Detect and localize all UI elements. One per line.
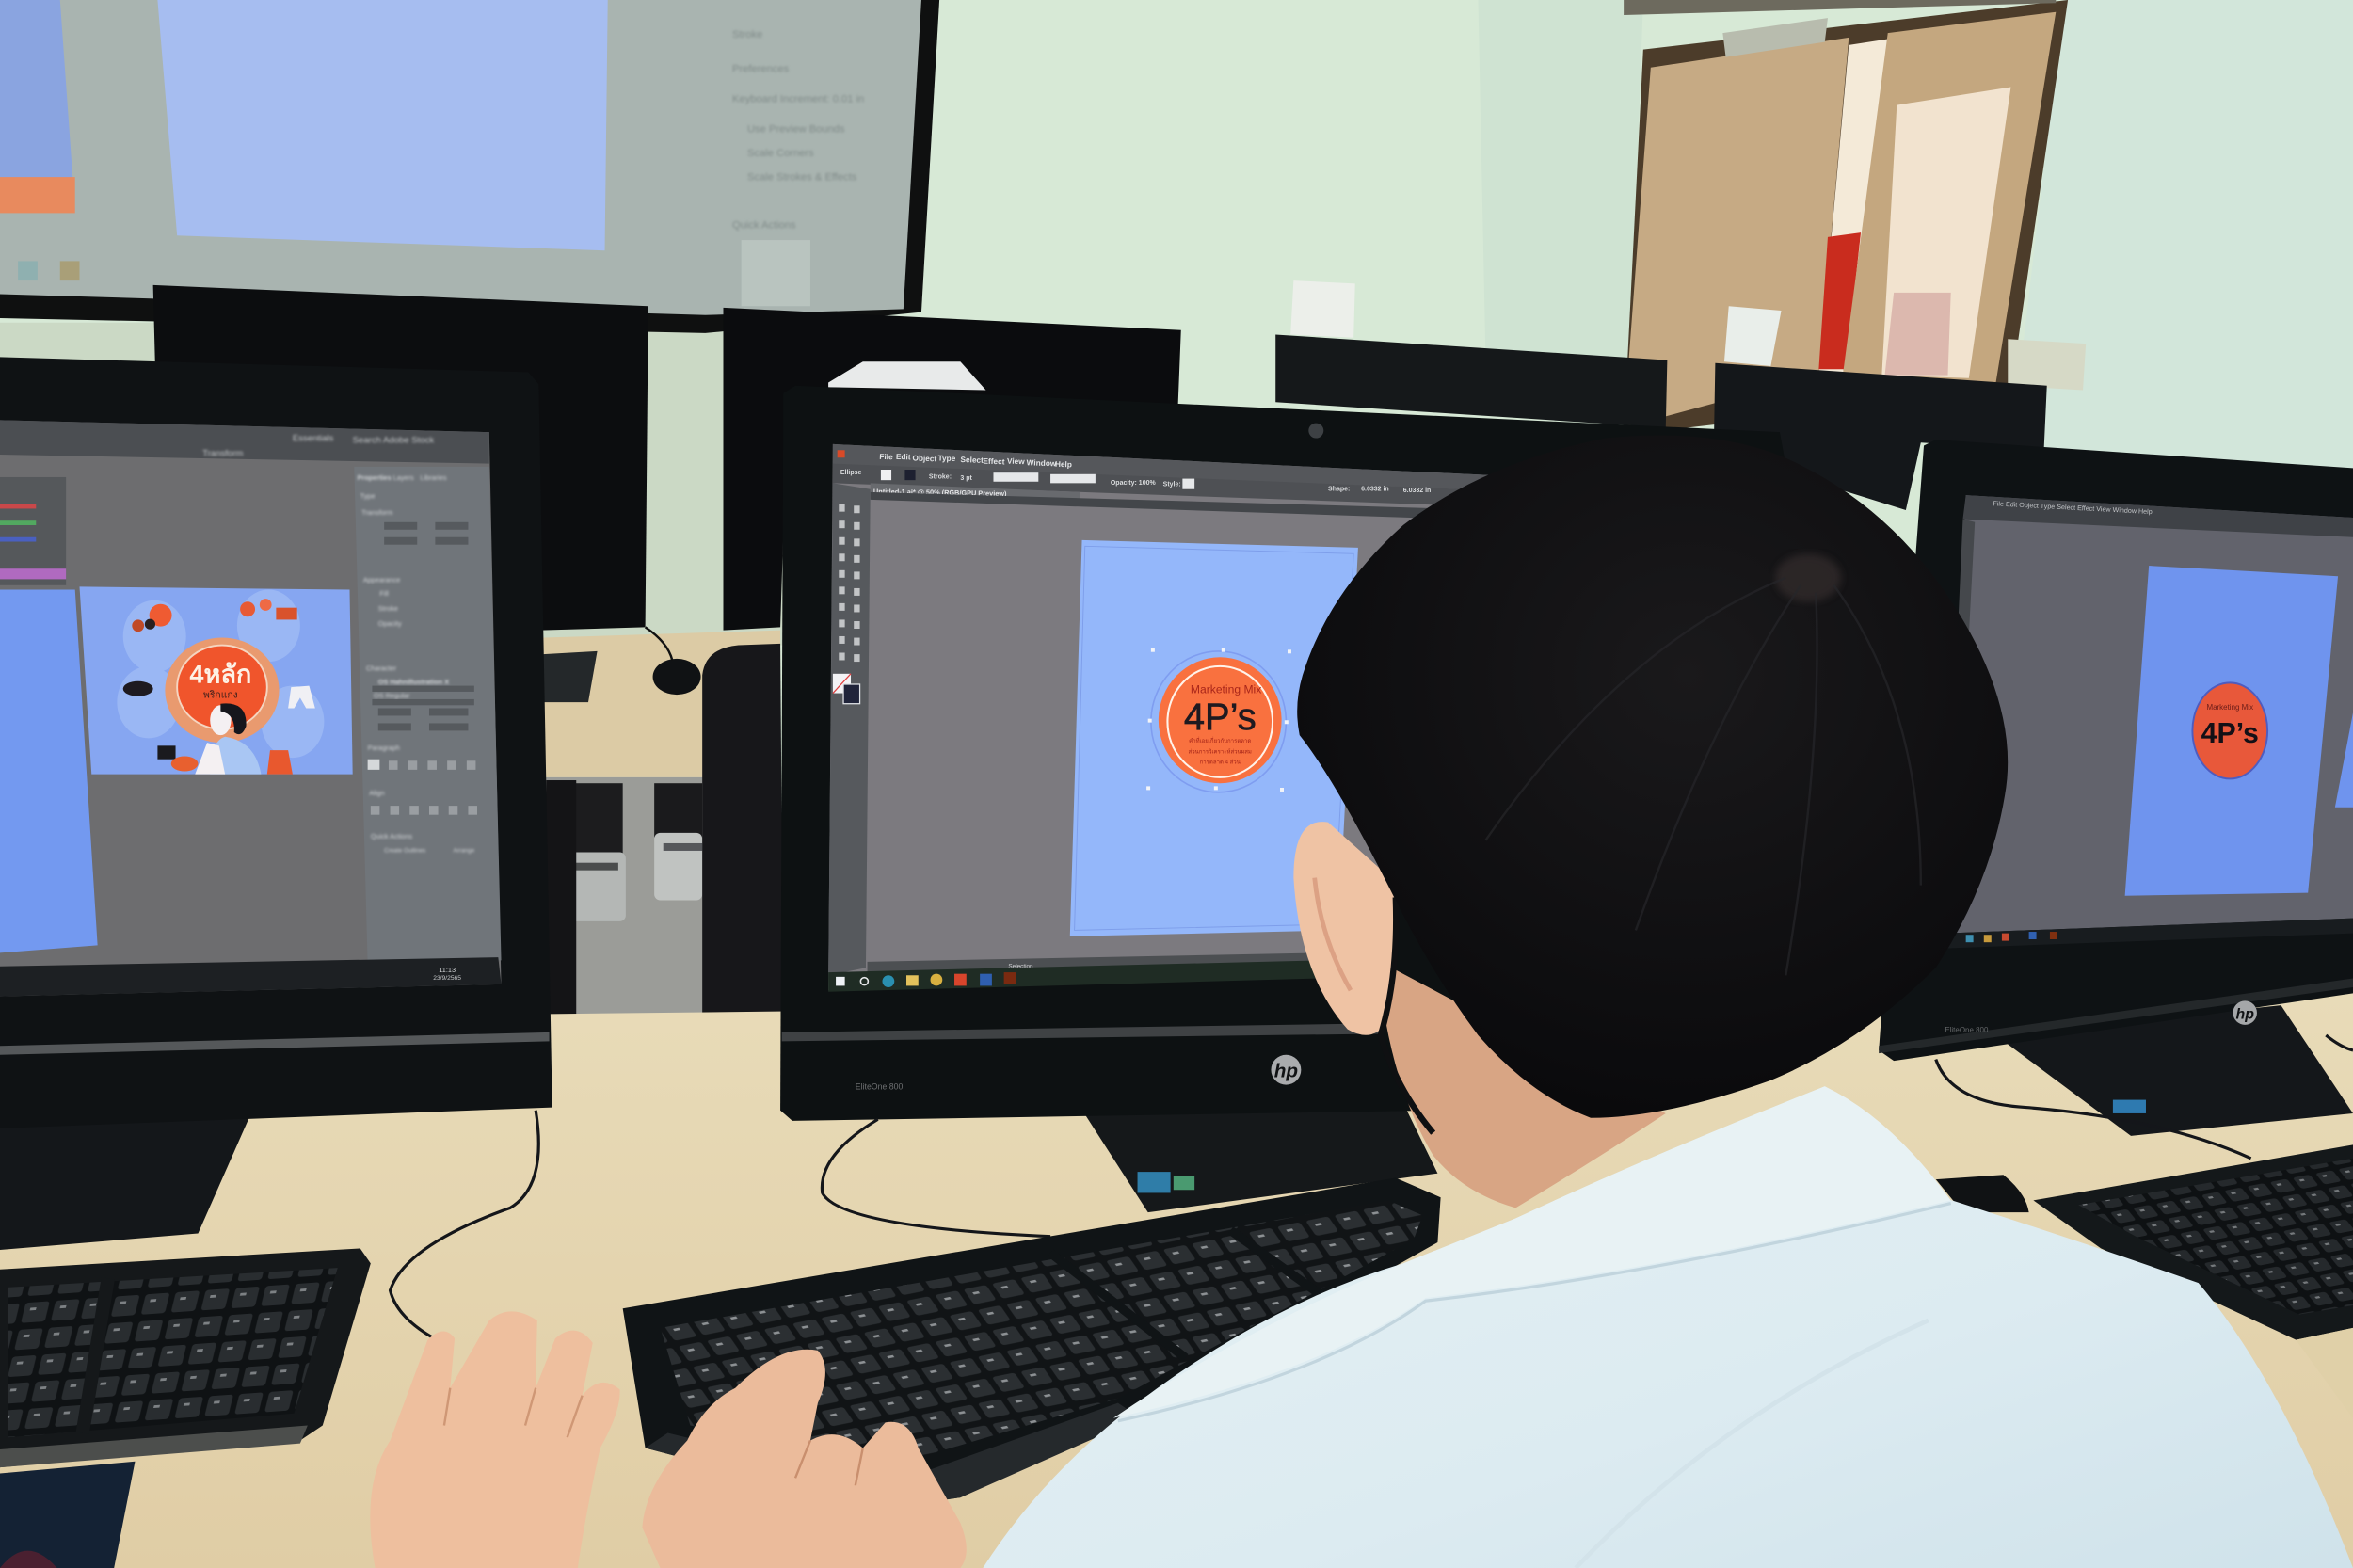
model label: EliteOne 800 — [856, 1081, 904, 1091]
selection ring — [1151, 651, 1286, 792]
4P's badge — [2192, 682, 2267, 778]
properties tabs: Properties — [357, 473, 392, 482]
second cable — [2326, 1035, 2353, 1050]
option labels: 3 pt — [960, 475, 973, 482]
option labels: 6.0332 in — [1361, 486, 1389, 492]
shirt fold — [1576, 1320, 1929, 1568]
screen — [828, 444, 1500, 990]
bezel — [1879, 440, 2353, 1061]
bezel — [780, 386, 1785, 1121]
right monitor cable — [1936, 1060, 2251, 1159]
properties panel — [354, 467, 502, 964]
artboard — [1070, 540, 1358, 936]
centre monitor cable — [822, 1119, 1050, 1237]
menu items: Select — [960, 455, 984, 465]
badge heading: Marketing Mix — [2206, 703, 2253, 712]
back monitor 1 — [153, 285, 648, 631]
tray clock: 11:13 — [439, 966, 456, 974]
student's ear — [1293, 822, 1399, 1035]
back monitor 3 — [1275, 335, 1667, 427]
infographic badge — [165, 638, 280, 743]
back monitor 2 — [723, 308, 1181, 631]
hair strands — [1485, 578, 1921, 975]
menu text: File Edit Object Type Select Effect View Window Help — [1993, 500, 2153, 516]
infographic title: 4หลัก — [189, 659, 251, 688]
smartphone on right desk — [1936, 1175, 2029, 1212]
projected preferences button — [742, 240, 810, 306]
next artboard — [2335, 712, 2353, 808]
stand — [1080, 1103, 1437, 1212]
badge ring — [1167, 666, 1273, 777]
selection handles — [1146, 648, 1291, 792]
mask strap — [1381, 897, 1433, 1133]
student's neck — [1378, 960, 1666, 1208]
document tab — [871, 483, 1080, 505]
centre keyboard — [623, 1177, 1441, 1510]
hp logo — [1271, 1055, 1301, 1085]
menu bar — [0, 420, 489, 464]
toolbar text: Search Adobe Stock — [353, 435, 434, 445]
color sliders — [0, 504, 66, 579]
toolbar — [1962, 495, 2353, 537]
rear keyboard and mouse — [543, 627, 701, 702]
left keyboard — [0, 1248, 371, 1467]
app icon — [838, 450, 845, 457]
menu items — [879, 452, 1072, 469]
tools strip — [1945, 520, 1975, 919]
chin highlight — [1879, 978, 2353, 1053]
fill and stroke swatches — [833, 674, 860, 704]
properties tabs: Layers — [393, 473, 414, 482]
option labels: 6.0332 in — [1403, 488, 1431, 494]
stroke option fields — [881, 470, 1194, 489]
taskbar — [0, 957, 502, 997]
smartphone — [0, 1462, 135, 1568]
paragraph and align icons — [368, 760, 477, 815]
projected menu text: Use Preview Bounds — [747, 123, 845, 135]
properties tabs: Libraries — [420, 473, 447, 482]
badge heading: Marketing Mix — [1191, 683, 1261, 696]
options bar — [833, 464, 1500, 507]
hp logo — [2233, 1000, 2257, 1025]
floor — [543, 777, 780, 1035]
artboard — [2125, 566, 2338, 896]
taskbar — [1945, 919, 2353, 949]
model label: EliteOne 800 — [1945, 1026, 1989, 1034]
properties tabs: Type — [360, 491, 376, 500]
document title: Untitled-1.ai* @ 50% (RGB/GPU Preview) — [873, 488, 1007, 498]
chin highlight — [782, 1023, 1381, 1041]
student's shirt — [983, 1086, 2353, 1568]
menu items: View — [1007, 456, 1025, 466]
badge body text: คำที่เอยเกี่ยวกับการตลาด — [1189, 737, 1251, 744]
tools panel — [828, 483, 871, 975]
badge body text: การตลาด 4 ส่วน — [1200, 759, 1241, 765]
projected artboard — [157, 0, 608, 250]
collar shadow — [1118, 1204, 1951, 1421]
badge title: 4P’s — [1184, 696, 1257, 738]
right hand — [642, 1350, 967, 1568]
bezel — [0, 357, 552, 1128]
color panel — [0, 477, 66, 585]
infographic subtitle: พริกแกง — [203, 689, 238, 700]
artboard guide — [1075, 546, 1353, 930]
projected menu text: Scale Strokes & Effects — [747, 171, 857, 183]
left monitor cable — [391, 1111, 538, 1343]
infographic soft bubbles — [117, 590, 324, 758]
option labels — [840, 470, 1431, 494]
transform fields — [372, 522, 474, 730]
properties tabs: Quick Actions — [371, 832, 413, 840]
infographic small icons — [123, 599, 315, 775]
projected menu text: Keyboard Increment: 0.01 in — [732, 93, 864, 104]
centre monitor — [780, 386, 1785, 1212]
menu items: Window — [1026, 457, 1057, 468]
student's hair — [1297, 436, 2008, 1118]
collar — [1113, 1086, 1951, 1418]
stand — [0, 1118, 249, 1250]
hp logo: hp — [2235, 1007, 2254, 1023]
classroom doors — [1624, 0, 2068, 435]
rear desk — [543, 631, 780, 777]
projected taskbar icons — [18, 261, 80, 280]
wall column — [1478, 0, 1643, 420]
badge title: 4P’s — [2201, 718, 2259, 749]
toolbar text: Essentials — [293, 434, 334, 444]
properties tabs: Transform — [361, 508, 392, 517]
properties tabs: OS Hahnillustration X — [378, 678, 449, 686]
option labels: Shape: — [1328, 486, 1350, 492]
option labels: Stroke: — [929, 474, 952, 481]
properties tabs: Opacity — [378, 619, 402, 628]
left monitor — [0, 357, 552, 1250]
rear chair base — [546, 780, 702, 1028]
badge body text — [1189, 737, 1252, 765]
properties tabs: Paragraph — [368, 744, 400, 752]
webcam — [1308, 424, 1323, 439]
tool icons — [839, 504, 860, 662]
infographic figure — [195, 703, 261, 775]
right monitor — [1879, 440, 2353, 1136]
hp logo: hp — [1274, 1061, 1298, 1082]
black chair back — [702, 644, 783, 1028]
energy stickers — [1138, 1172, 1194, 1192]
option labels: Opacity: 100% — [1111, 480, 1156, 487]
projected side panel — [0, 0, 75, 210]
badge body text: ส่วนการวิเคราะห์ส่วนผสม — [1189, 747, 1252, 755]
tray date: 23/9/2565 — [433, 975, 461, 982]
menu items: Help — [1055, 459, 1072, 469]
right keyboard — [2033, 1144, 2353, 1340]
hair highlight — [1775, 553, 1841, 601]
option labels: Style: — [1163, 482, 1181, 488]
4P's badge — [1159, 657, 1282, 783]
menu items: File — [879, 452, 893, 461]
toolbar text — [202, 434, 434, 459]
paper on back monitor — [828, 361, 986, 391]
projected bottom-left tab — [0, 177, 75, 213]
blue sticker — [2113, 1100, 2146, 1113]
menu items: Effect — [983, 456, 1005, 466]
back monitor 4 — [1714, 363, 2047, 510]
option labels: Ellipse — [840, 470, 862, 476]
screen — [1945, 495, 2353, 934]
properties tabs: Character — [366, 664, 397, 673]
taskbar — [828, 960, 1321, 992]
menu items: Edit — [896, 452, 911, 461]
right wall — [2010, 0, 2353, 480]
properties tabs — [357, 473, 475, 855]
stand — [1996, 1005, 2353, 1136]
status bar — [868, 952, 1321, 972]
properties tabs: Arrange — [454, 848, 475, 855]
properties tabs: Fill — [379, 589, 389, 598]
status label: Selection — [1008, 963, 1033, 969]
projected menu text: Stroke — [732, 29, 762, 40]
projected menu text: Preferences — [732, 64, 790, 75]
taskbar icons — [836, 972, 1016, 987]
properties tabs: Stroke — [378, 604, 398, 613]
menu items: Object — [912, 453, 937, 463]
front desk — [0, 993, 2353, 1568]
lower wall behind monitors — [0, 323, 960, 646]
menu items: Type — [937, 453, 956, 463]
chin highlight — [0, 1032, 550, 1055]
projector screen — [0, 0, 939, 333]
projected menu text: Scale Corners — [747, 148, 814, 159]
properties tabs: OS Regular — [374, 691, 410, 699]
wall sign and outlet — [1290, 280, 2086, 391]
properties tabs: Create Outlines — [384, 848, 425, 855]
menu bar — [833, 444, 1500, 490]
projected menu text: Quick Actions — [732, 219, 796, 231]
left hand — [370, 1311, 620, 1568]
taskbar icons — [1966, 932, 2057, 942]
infographic artboard — [80, 586, 353, 775]
rulers — [871, 492, 1500, 520]
properties tabs: Align — [369, 789, 385, 797]
toolbar text: Transform — [202, 449, 243, 459]
screen — [0, 420, 502, 997]
projected menu text — [732, 29, 864, 231]
properties tabs: Appearance — [363, 576, 400, 584]
left artboard — [0, 590, 98, 952]
front desk edge at right — [2296, 1328, 2353, 1418]
